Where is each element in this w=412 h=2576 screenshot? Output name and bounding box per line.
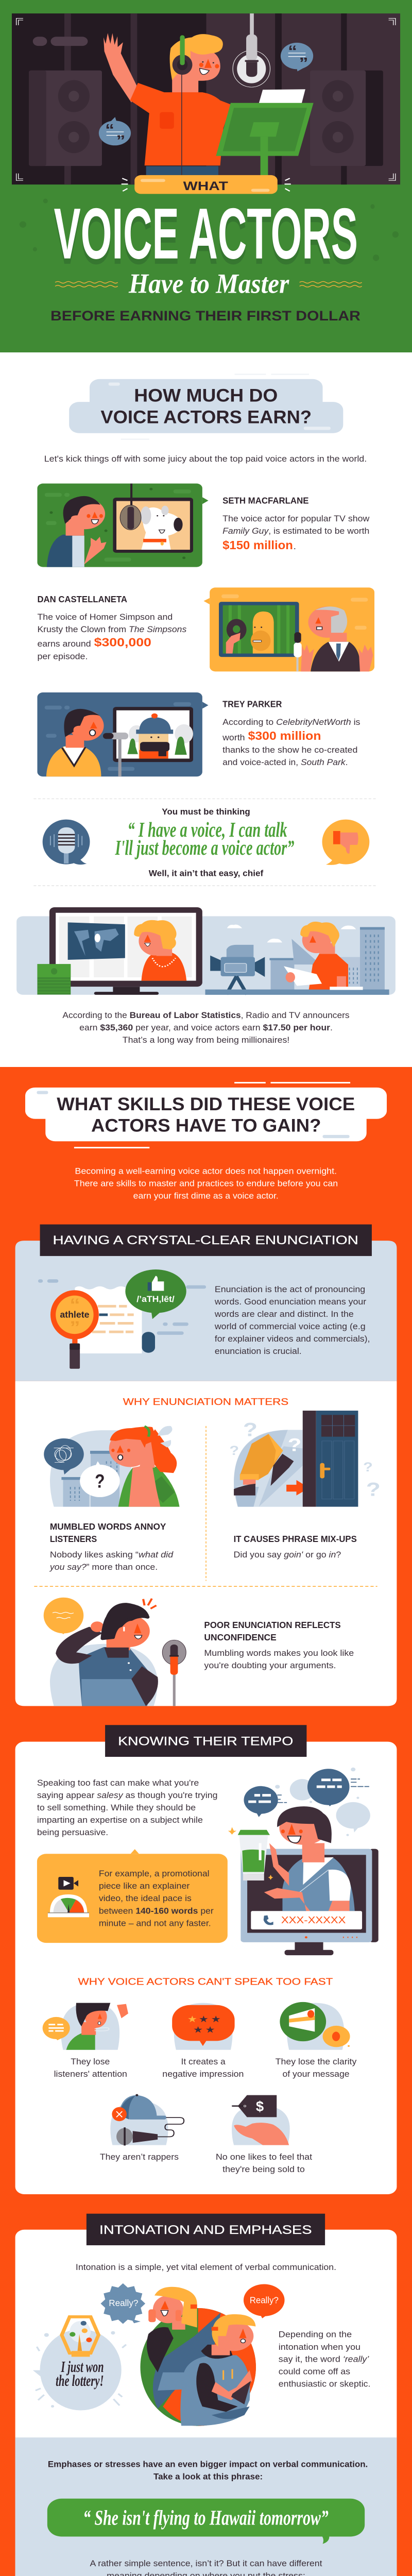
illustration: lottery bubble with trophy — [33, 2317, 126, 2411]
text: mumbled words — [49, 1522, 174, 1572]
section: what skills did these voice actors gain — [15, 1011, 397, 1706]
callout: you must be thinking: Well, it ain’t that easy, chief — [149, 869, 264, 878]
illustration: dictionary and lipstick mic: ” — [70, 1317, 80, 1337]
text: intonation intro: Intonation is a simple, yet vital element of verbal communication. — [76, 2263, 336, 2273]
text: poor enunciation: Mumbling words makes you look like — [204, 1649, 354, 1658]
callout: example phrase — [47, 2499, 365, 2544]
text: depending on intonation — [279, 2330, 370, 2389]
subheading: why enunciation matters: WHY ENUNCIATION MATTERS — [123, 1397, 288, 1407]
text: enunciation definition: Enunciation is the act of pronouncing — [215, 1285, 365, 1294]
text: emphases intro — [48, 2460, 368, 2482]
section: reasons and intonation — [15, 2002, 397, 2576]
heading: enunciation — [40, 1225, 372, 1256]
text: depending on intonation: Depending on the — [279, 2330, 352, 2340]
heading: what skills: WHAT SKILLS DID THESE VOICE — [57, 1094, 355, 1114]
text: Seth MacFarlane — [222, 496, 370, 552]
text: phrase mix-ups: Did you say goin' or go in? — [234, 1550, 341, 1560]
text: mumbled words: MUMBLED WORDS ANNOY — [50, 1522, 166, 1532]
text: Dan Castellaneta: Krusty the Clown from The Simpsons — [37, 625, 187, 634]
text: speaking too fast: saying appear salesy as though you're trying — [37, 1791, 217, 1800]
illustration: door and phrase mix-ups: ? — [243, 1418, 258, 1440]
text: speaking too fast: imparting an expertise on a subject while — [37, 1816, 203, 1825]
panel: Seth MacFarlane illustration — [37, 484, 209, 567]
text: Dan Castellaneta — [37, 595, 187, 662]
icon: thumbs down bubble — [322, 820, 369, 865]
text: Seth MacFarlane: SETH MACFARLANE — [222, 496, 308, 506]
text: mumbled words: you say?” more than once. — [49, 1563, 158, 1572]
heading: what skills — [25, 1082, 387, 1148]
illustration: door and phrase mix-ups: ? — [363, 1460, 373, 1474]
text: Trey Parker: $300 million — [248, 729, 321, 742]
text: speaking too fast: Speaking too fast can make what you're — [37, 1778, 199, 1788]
text: Trey Parker: According to CelebrityNetWorth is — [222, 718, 360, 727]
label: WHAT plate — [122, 175, 291, 194]
text: skills intro: earn your first dime as a voice actor. — [133, 1191, 279, 1201]
icon: microphone bubble — [43, 820, 90, 865]
text: reasons row 1: of your message — [282, 2070, 350, 2079]
callout: ideal pace: For example, a promotional — [99, 1869, 210, 1879]
callout: ideal pace: video, the ideal pace is — [99, 1894, 192, 1904]
text: mumbled words: Nobody likes asking “what did — [50, 1550, 174, 1560]
icon: video camera — [58, 1877, 78, 1890]
panel: enunciation — [15, 1225, 397, 1706]
panel: Dan Castellaneta illustration — [203, 587, 374, 671]
text: simple sentence — [90, 2559, 322, 2576]
text: reasons row 1: listeners' attention — [54, 2070, 127, 2079]
illustration: monitor with news anchor — [37, 907, 202, 995]
icon: speech bubble right: “ — [288, 43, 297, 59]
phone number bar: XXX-XXXXX — [281, 1915, 346, 1925]
text: Dan Castellaneta: earns around — [37, 639, 91, 649]
subtitle: Have to Master: Have to Master — [128, 268, 289, 299]
text: Dan Castellaneta: per episode. — [37, 652, 88, 662]
label: WHAT plate: WHAT — [183, 179, 228, 193]
callout: you must be thinking: “ I have a voice, I can talk — [127, 818, 287, 842]
text: enunciation definition: words. Good enunciation means your — [214, 1297, 367, 1307]
text: poor enunciation — [204, 1620, 354, 1670]
tagline: BEFORE EARNING THEIR FIRST DOLLAR — [50, 309, 360, 324]
header section — [12, 13, 400, 324]
icon: price tag and hand: $ — [256, 2099, 264, 2114]
text: Bureau of Labor Statistics: According to the Bureau of Labor Statistics, Radio and TV announcers — [62, 1011, 350, 1021]
illustration: fast-talking salesman on TV — [228, 1768, 379, 1955]
text: reasons row 1: negative impression — [162, 2070, 244, 2079]
text: skills intro: There are skills to master and practices to endure before you can — [74, 1179, 338, 1189]
icon: speech bubble right: ” — [299, 55, 308, 71]
section: Trey Parker and reality check — [16, 692, 396, 995]
icon: speech bubble left: “ — [105, 121, 114, 138]
text: speaking too fast — [37, 1778, 217, 1838]
illustration: door and phrase mix-ups: ? — [366, 1479, 381, 1500]
text: enunciation definition — [214, 1285, 370, 1357]
illustration: door and phrase mix-ups — [229, 1411, 381, 1507]
section: emphases — [42, 2460, 369, 2576]
text: Trey Parker: TREY PARKER — [222, 699, 282, 709]
text: Trey Parker: worth — [222, 733, 245, 742]
subheading: why voice actors can't speak too fast: WHY VOICE ACTORS CAN'T SPEAK TOO FAST — [78, 1977, 333, 1987]
text: speaking too fast: to sell something. While they should be — [37, 1803, 196, 1813]
text: phrase mix-ups: IT CAUSES PHRASE MIX-UPS — [234, 1534, 357, 1544]
heading: intonation and emphases: INTONATION AND EMPHASES — [99, 2223, 312, 2236]
text: Bureau of Labor Statistics: That’s a long way from being millionaires! — [123, 1036, 289, 1045]
icon: negative impression: ★ — [199, 2014, 209, 2024]
heading: how much do voice actors earn — [69, 374, 343, 440]
text: Trey Parker: thanks to the show he co-created — [222, 745, 357, 755]
illustration: lottery bubble with trophy: the lottery! — [56, 2372, 104, 2389]
text: skills intro — [74, 1166, 338, 1201]
text: Seth MacFarlane: Family Guy, is estimated to be worth — [222, 527, 369, 536]
illustration: dictionary and lipstick mic: “ — [70, 1295, 80, 1314]
illustration: two people reacting — [140, 2287, 256, 2426]
section: knowing their tempo — [15, 1725, 397, 2194]
panel: news broadcast illustration — [16, 907, 396, 995]
illustration: door and phrase mix-ups: ? — [229, 1444, 239, 1458]
icon: really bubble blue: Really? — [109, 2298, 138, 2309]
panel: tempo — [15, 1725, 397, 2194]
callout: ideal pace: piece like an explainer — [99, 1882, 190, 1891]
callout: ideal pace: minute – and not any faster. — [99, 1919, 211, 1928]
text: depending on intonation: enthusiastic or skeptic. — [279, 2379, 370, 2389]
figure: Trey Parker — [46, 709, 128, 776]
text: reasons row 2: No one likes to feel that — [216, 2153, 313, 2162]
text: Dan Castellaneta: $300,000 — [94, 635, 151, 649]
icon: losing clarity — [280, 2002, 350, 2050]
icon: really bubble orange: Really? — [250, 2295, 279, 2306]
callout: ideal pace — [37, 1849, 228, 1943]
text: depending on intonation: could come off as — [279, 2367, 350, 2377]
heading: intonation and emphases — [87, 2214, 325, 2245]
heading: how much do voice actors earn: VOICE ACTORS EARN? — [100, 408, 312, 428]
text: Dan Castellaneta: DAN CASTELLANETA — [37, 595, 127, 604]
text: enunciation definition: enunciation is crucial. — [215, 1347, 302, 1357]
icon: studio microphone — [233, 13, 270, 87]
section: why enunciation matters — [34, 1397, 381, 1706]
icon: really bubble orange — [244, 2284, 285, 2318]
text: Bureau of Labor Statistics: earn $35,360 per year, and voice actors earn $17.50 per hour. — [79, 1023, 333, 1033]
heading: enunciation: HAVING A CRYSTAL-CLEAR ENUNCIATION — [53, 1233, 358, 1247]
text: reasons row 1: It creates a — [181, 2057, 226, 2066]
illustration: script stand — [216, 89, 314, 176]
text: Trey Parker: and voice-acted in, South Park. — [222, 758, 348, 767]
text: poor enunciation: UNCONFIDENCE — [204, 1633, 277, 1643]
illustration: door and phrase mix-ups: ? — [288, 1435, 301, 1455]
illustration: dictionary and lipstick mic: athlete — [60, 1310, 90, 1320]
text: Dan Castellaneta: The voice of Homer Simpson and — [37, 613, 173, 622]
callout: you must be thinking — [115, 807, 294, 878]
illustration: dictionary and lipstick mic — [38, 1269, 206, 1369]
illustration: unconfident speaker — [44, 1598, 186, 1706]
icon: speech bubble right — [281, 43, 313, 71]
section: how much do voice actors earn — [37, 374, 374, 671]
text: Trey Parker — [222, 699, 360, 767]
text: reasons row 2: they're being sold to — [222, 2165, 305, 2174]
intro text: Let's kick things off with some juicy about the top paid voice actors in the world. — [44, 454, 367, 464]
icon: really bubble blue — [100, 2283, 145, 2324]
text: Seth MacFarlane: . — [293, 542, 296, 551]
illustration: recording studio with voice actor — [12, 13, 400, 184]
text: Seth MacFarlane: The voice actor for popular TV show — [222, 514, 370, 523]
icon: negative impression — [172, 2003, 235, 2050]
text: skills intro: Becoming a well-earning voice actor does not happen overnight. — [75, 1166, 337, 1176]
figure: dog on screen — [113, 484, 193, 553]
phone number bar — [251, 1911, 362, 1929]
illustration: lottery bubble with trophy: I just won — [61, 2358, 104, 2376]
icon: speech bubble left — [99, 117, 131, 149]
text: enunciation definition: words are clear and distinct. In the — [214, 1310, 354, 1319]
callout: ideal pace: between 140-160 words per — [99, 1906, 214, 1916]
icon: speech bubble left: ” — [116, 132, 125, 149]
text: poor enunciation: POOR ENUNCIATION REFLECTS — [204, 1620, 341, 1631]
text: phrase mix-ups — [234, 1534, 357, 1560]
heading: what skills: ACTORS HAVE TO GAIN? — [91, 1116, 321, 1136]
icon: losing attention — [43, 2003, 128, 2050]
text: poor enunciation: you're doubting your arguments. — [204, 1661, 336, 1670]
heading: knowing their tempo: KNOWING THEIR TEMPO — [118, 1734, 293, 1748]
icon: negative impression: ★ — [205, 2025, 215, 2035]
figure: Dan Castellaneta — [294, 606, 373, 671]
icon: price tag and hand — [232, 2095, 290, 2145]
text: simple sentence: A rather simple sentence, isn’t it? But it can have different — [90, 2559, 322, 2569]
icon: not rappers — [110, 2094, 184, 2145]
text: depending on intonation: intonation when you — [279, 2343, 360, 2352]
icon: negative impression: ★ — [211, 2014, 221, 2024]
text: enunciation definition: for explainer videos and commercials), — [215, 1334, 370, 1344]
text: reasons row 2 — [100, 2153, 313, 2174]
text: Seth MacFarlane: $150 million — [222, 538, 293, 552]
illustration: dictionary and lipstick mic: /’aTH,lēt/ — [136, 1294, 175, 1304]
panel: Trey Parker illustration — [37, 692, 209, 776]
illustration: field reporter with camera — [205, 922, 389, 995]
heading: how much do voice actors earn: HOW MUCH DO — [134, 386, 278, 406]
text: Bureau of Labor Statistics — [62, 1011, 350, 1045]
text: reasons row 1 — [54, 2057, 357, 2079]
figure: Seth MacFarlane — [47, 496, 107, 567]
text: emphases intro: Take a look at this phrase: — [153, 2472, 263, 2482]
text: depending on intonation: say it, the word ‘really’ — [279, 2354, 369, 2364]
icon: pace gauge — [48, 1894, 89, 1917]
text: reasons row 2: They aren’t rappers — [100, 2153, 179, 2162]
text: enunciation definition: world of commercial voice acting (e.g — [214, 1322, 366, 1332]
text: mumbled words: LISTENERS — [50, 1534, 97, 1544]
callout: you must be thinking: You must be thinking — [162, 807, 250, 817]
text: speaking too fast: being persuasive. — [37, 1828, 108, 1838]
text: reasons row 1: They lose the clarity — [276, 2057, 357, 2066]
panel: intonation and emphases — [15, 2214, 397, 2576]
text: reasons row 1: They lose — [71, 2057, 110, 2066]
figure: Homer on screen — [219, 602, 299, 657]
illustration: listener annoyed by mumbling — [44, 1426, 179, 1507]
icon: negative impression: ★ — [187, 2014, 197, 2024]
figure: Stan on screen — [113, 707, 193, 762]
figure: voice actor — [104, 33, 231, 175]
illustration: listener annoyed by mumbling: ? — [95, 1470, 105, 1492]
icon: negative impression: ★ — [193, 2025, 203, 2035]
heading: knowing their tempo — [105, 1725, 306, 1757]
